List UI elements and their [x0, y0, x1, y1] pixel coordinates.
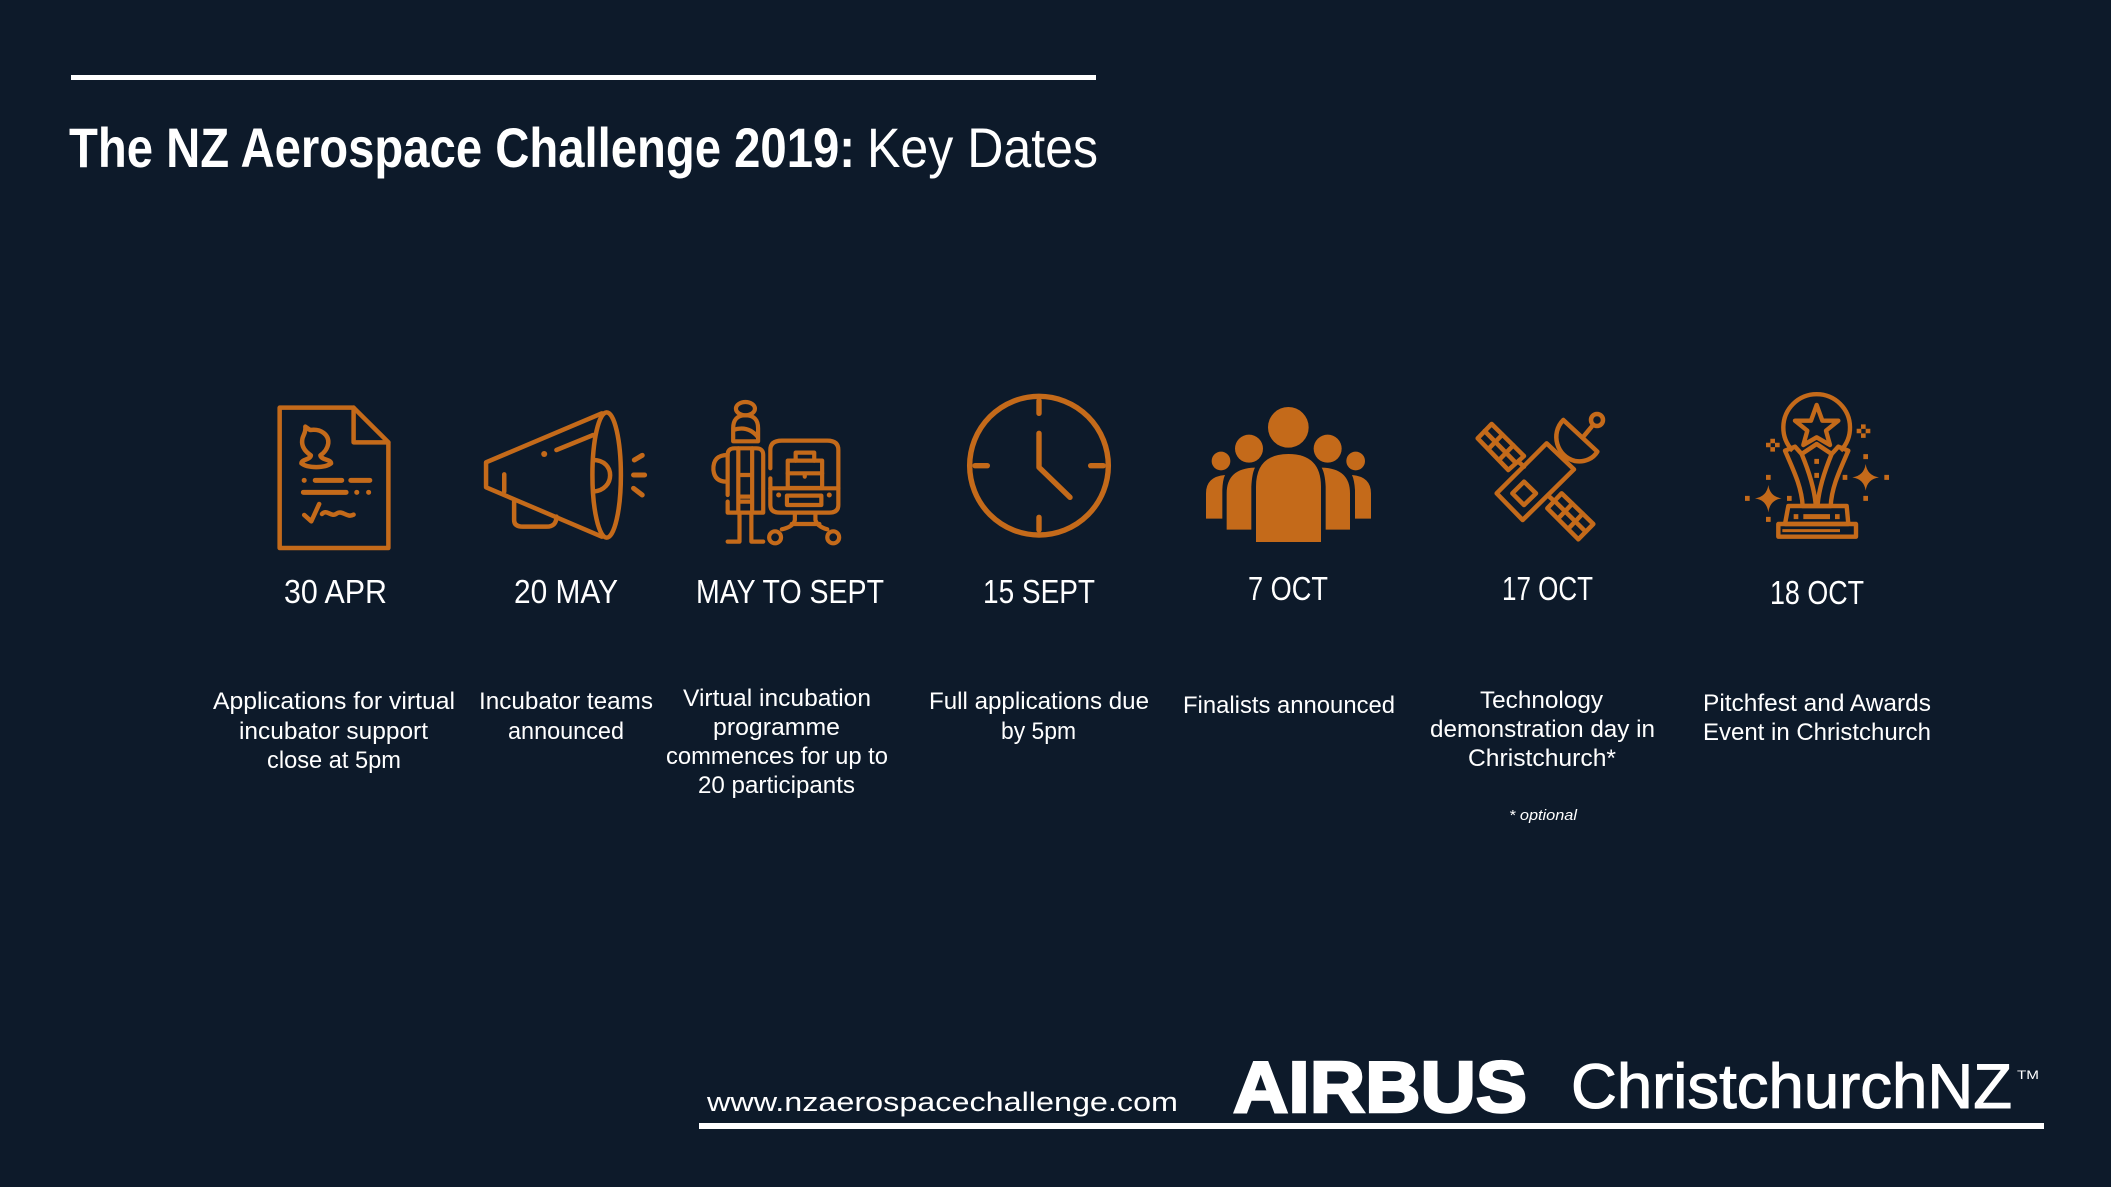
footnote: optional: * optional	[1509, 807, 1578, 824]
panel: 20 May	[479, 412, 653, 745]
icon: clock	[970, 396, 1108, 535]
description: full applications due	[929, 688, 1149, 745]
icon: satellite	[1478, 414, 1603, 539]
date: 15 SEPT: 15 SEPT	[983, 573, 1095, 610]
date: 18 OCT: 18 OCT	[1770, 574, 1864, 611]
description: pitchfest and awards: Event in Christchurch	[1703, 719, 1931, 746]
date: MAY TO SEPT: MAY TO SEPT	[696, 573, 884, 610]
icon: megaphone	[486, 412, 645, 538]
panel: 17 Oct	[1430, 414, 1655, 824]
description: pitchfest and awards: Pitchfest and Awards	[1703, 690, 1931, 717]
description: finalists announced: Finalists announced	[1183, 692, 1395, 719]
description: virtual incubation programme: 20 participants	[698, 772, 855, 799]
title: Key Dates	[867, 116, 1098, 179]
panel: 30 April	[213, 408, 455, 774]
description: technology demonstration day: demonstration day in	[1430, 716, 1655, 743]
panel: 15 Sept	[929, 396, 1149, 745]
logo: Airbus: AIRBUS	[1233, 1048, 1527, 1128]
description: full applications due: Full applications due	[929, 688, 1149, 715]
logo: ChristchurchNZ: ChristchurchNZ	[1571, 1052, 2012, 1122]
icon: traveller with luggage	[713, 402, 839, 543]
date: 17 OCT: 17 OCT	[1502, 570, 1593, 607]
date: 7 OCT: 7 OCT	[1248, 570, 1328, 607]
description: technology demonstration day	[1430, 687, 1655, 772]
icon: group of people	[1206, 407, 1371, 542]
panel: 7 Oct	[1183, 407, 1395, 719]
icon: application document	[280, 408, 388, 548]
footer website: www.nzaerospacechallenge.com	[706, 1087, 1178, 1117]
panel: May to Sept	[666, 402, 888, 799]
icon: award trophy	[1745, 394, 1889, 537]
panel: 18 Oct	[1703, 394, 1931, 746]
description: full applications due: by 5pm	[1001, 718, 1076, 745]
description: teams announced: announced	[508, 718, 624, 745]
description: technology demonstration day: Christchurch*	[1468, 745, 1616, 772]
date: 30 APR: 30 APR	[284, 573, 387, 610]
description: applications close: close at 5pm	[267, 747, 401, 774]
description: teams announced	[479, 688, 653, 745]
description: applications close	[213, 688, 455, 774]
description: virtual incubation programme: Virtual incubation	[683, 685, 871, 712]
description: virtual incubation programme: commences for up to	[666, 743, 888, 770]
logo: ChristchurchNZ: TM	[2017, 1068, 2039, 1082]
description: applications close: Applications for virtual	[213, 688, 455, 715]
description: teams announced: Incubator teams	[479, 688, 653, 715]
description: virtual incubation programme: programme	[713, 714, 840, 741]
description: applications close: incubator support	[239, 718, 428, 745]
description: technology demonstration day: Technology	[1480, 687, 1603, 714]
date: 20 MAY: 20 MAY	[514, 573, 618, 610]
description: virtual incubation programme	[666, 685, 888, 799]
description: pitchfest and awards	[1703, 690, 1931, 746]
title: The NZ Aerospace Challenge 2019:	[69, 116, 855, 179]
